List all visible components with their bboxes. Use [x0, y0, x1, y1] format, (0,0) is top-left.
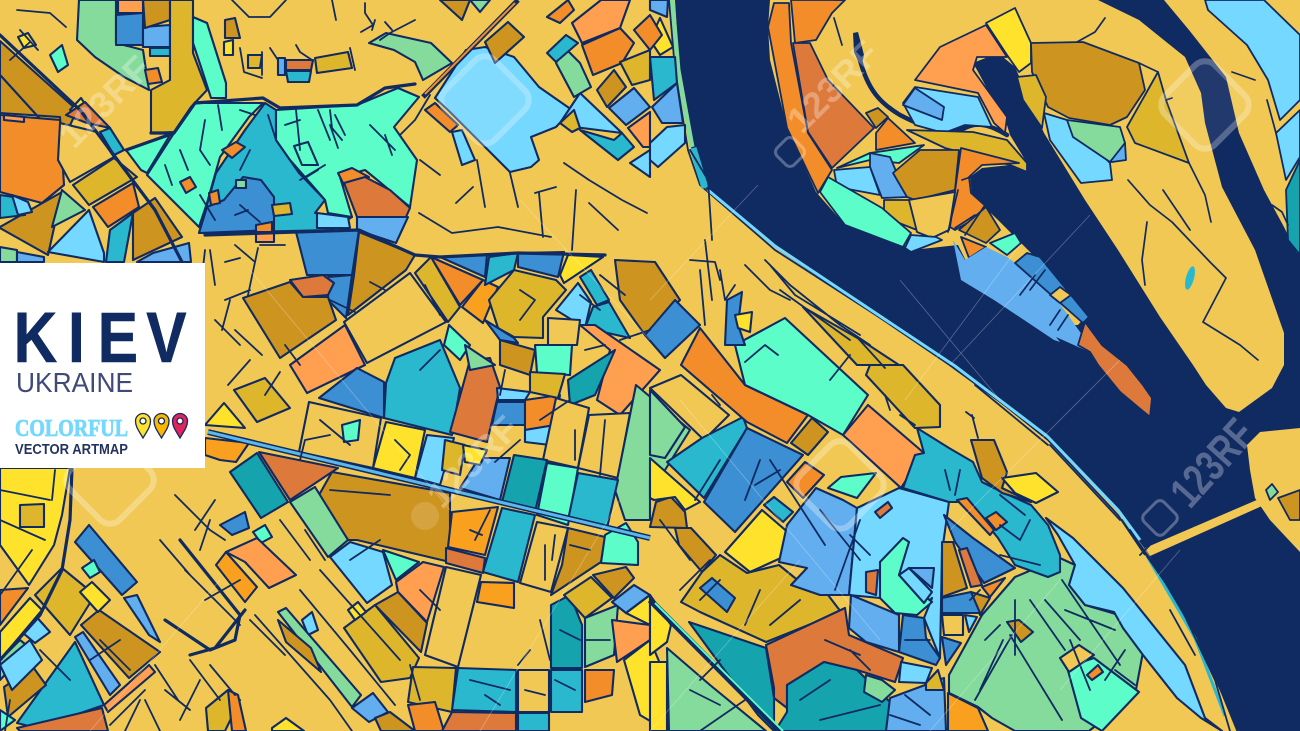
- watermark logo north east: [1156, 56, 1254, 154]
- navy channel blob: [853, 32, 864, 68]
- blocks: northern park: [147, 88, 419, 243]
- watermark: 123RF centre: 123RF: [419, 407, 527, 516]
- main roads: [0, 35, 605, 660]
- watermark: 123RF north: 123RF: [779, 32, 887, 141]
- south-bank stripe: [1150, 560, 1238, 731]
- watermark lines: [90, 185, 1180, 731]
- icon: yellow map pin: [136, 414, 150, 438]
- label: COLORFUL: COLORFUL: [15, 416, 128, 442]
- watermark camera north: [773, 135, 807, 169]
- island: south east sand islet: [1247, 428, 1300, 552]
- watermark camera east: [1140, 498, 1180, 538]
- sky stripe along bank: [708, 190, 1140, 540]
- lagoon: [1183, 265, 1197, 291]
- watermark logo north: [436, 51, 534, 149]
- blocks: central north: [243, 230, 700, 520]
- island tracks: [834, 0, 1288, 360]
- green stripe along upper bank: [672, 0, 692, 147]
- east bank sand strip: [1164, 0, 1300, 253]
- east sky parcels: [1205, 0, 1300, 120]
- blocks: north west: [0, 0, 226, 262]
- blocks: central south: [216, 402, 687, 731]
- title panel: [0, 263, 205, 468]
- title: KIEV: KIEV: [14, 297, 187, 377]
- watermark logo south west: [61, 431, 159, 529]
- diagonal rail corridor north: [423, 0, 518, 97]
- watermark logo centre: [791, 436, 889, 534]
- islands in the river: [768, 0, 1300, 556]
- blocks: south west: [0, 378, 304, 731]
- watermark logo small: [411, 502, 439, 530]
- south east islet core: [1278, 490, 1300, 520]
- river Dnieper: [675, 0, 1300, 731]
- watermark: 123RF west: 123RF: [51, 47, 159, 156]
- icon: amber map pin: [154, 414, 169, 438]
- blocks: east of centre: [650, 292, 1222, 731]
- channel curve: [860, 60, 1007, 135]
- railway stripe: [208, 0, 783, 731]
- teal stripe along bank: [693, 148, 705, 188]
- label: VECTOR ARTMAP: VECTOR ARTMAP: [15, 442, 128, 458]
- west island parcels: [768, 3, 832, 193]
- blocks: north centre: [224, 0, 685, 177]
- icon: red map pin: [172, 414, 188, 438]
- island: large sand island: [768, 0, 1284, 412]
- watermark: 123RF east: 123RF: [1161, 410, 1264, 517]
- bank stripes: [669, 0, 1238, 731]
- causeway: [1145, 499, 1262, 556]
- subtitle: UKRAINE: UKRAINE: [16, 367, 133, 398]
- rail corridor south: [650, 600, 780, 731]
